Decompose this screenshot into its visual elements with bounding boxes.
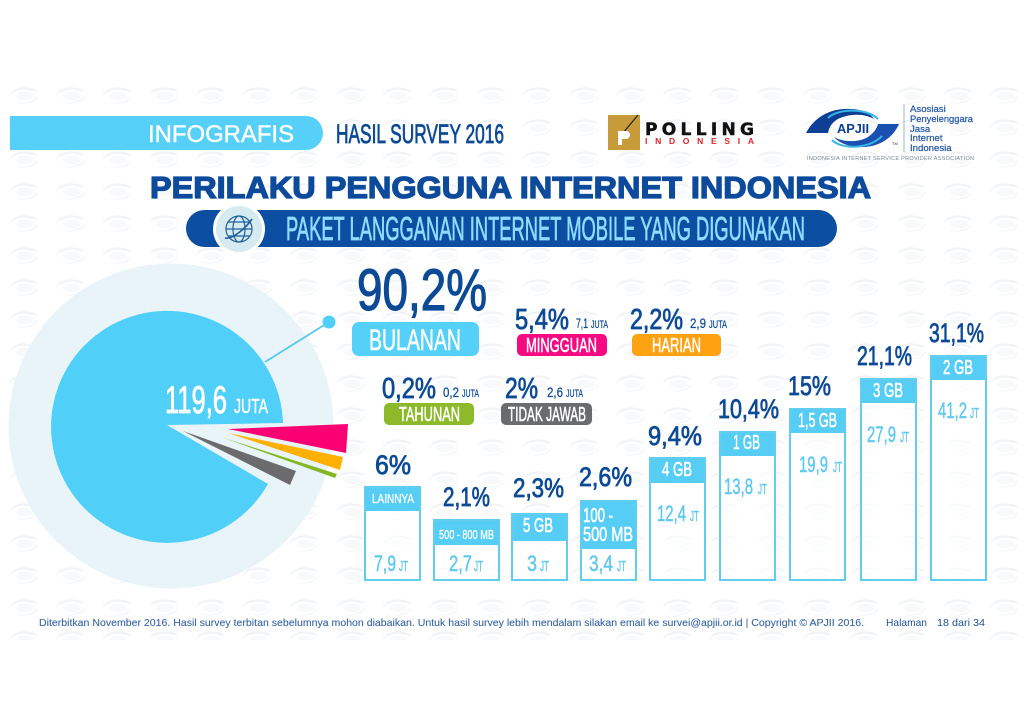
bar: 4 GB: JT [690,508,699,525]
bar: 3 GB: 27,9 [867,422,896,447]
bar: 1,5 GB: 15% [788,371,831,401]
stat: harian: JUTA [709,319,727,331]
logo: APJII: Jasa [910,124,931,135]
bar: 4 GB: 9,4% [648,421,702,451]
pie value: JUTA [234,396,268,418]
stat: harian [630,304,727,357]
pie value: 119,6 [165,379,227,422]
bar: lainnya: LAINNYA [372,491,414,506]
logo: APJII: Asosiasi [910,104,946,115]
bar: 4 GB: 4 GB [662,459,692,481]
stat: tidak jawab: 2% [505,373,538,405]
logo: polling indonesia: INDONESIA [645,136,754,146]
bar: 100-500 MB: JT [617,558,626,575]
logo: polling indonesia [608,115,754,150]
stat: tahunan: 0,2 [443,384,459,400]
bar: 5 GB [511,473,568,580]
logo: APJII: INDONESIA INTERNET SERVICE PROVIDER ASSOCIATION [807,156,974,162]
bar: 1,5 GB: JT [833,459,842,476]
stat: tidak jawab: 2,6 [547,384,563,400]
bar: 500-800 MB: 500 - 800 MB [439,527,494,542]
page number: Halaman [886,617,927,629]
logo: APJII [806,104,974,162]
bar: 1 GB: 10,4% [718,394,779,424]
stat: tahunan: 0,2% [382,373,436,405]
bar: 1 GB: 1 GB [733,432,760,454]
bar: 1 GB: JT [758,481,767,498]
bar: 1,5 GB [788,371,846,580]
stat: tahunan [382,373,479,426]
header banner: infografis: INFOGRAFIS [148,121,294,148]
subtitle banner [186,203,837,255]
bar: lainnya [364,450,421,580]
pie slice: harian [228,433,343,470]
page number [886,617,985,629]
logo: APJII: Indonesia [910,143,952,154]
bar: 2 GB: JT [970,405,979,422]
stat: tidak jawab: TIDAK JAWAB [508,404,586,426]
leader line [265,316,336,362]
bar: 100-500 MB [579,462,637,580]
stat: mingguan [515,304,608,357]
bar: 3 GB: 3 GB [873,380,903,402]
stat: tahunan: JUTA [462,388,479,400]
stat: harian: 2,9 [690,315,706,331]
bar: 3 GB: JT [900,429,909,446]
stat: bulanan: 90,2% [357,258,487,323]
bar: 3 GB [857,341,917,580]
pie slice: tahunan [224,438,337,478]
bar: 3 GB: 21,1% [857,341,912,371]
title: PERILAKU PENGGUNA INTERNET INDONESIA [150,170,871,205]
stat: tahunan: TAHUNAN [399,404,460,426]
bar: lainnya: JT [399,558,408,575]
pie slice: tidak jawab [183,431,296,485]
bar: 100-500 MB: 2,6% [579,462,632,492]
bar: 500-800 MB: 2,7 [449,551,472,576]
pie slice: mingguan [228,424,348,453]
header banner: infografis [10,116,323,150]
bar: 500-800 MB [433,482,500,580]
stat: tidak jawab [501,373,592,426]
bar: 500-800 MB: JT [474,558,483,575]
stat: harian: HARIAN [652,335,701,357]
stat: harian: 2,2% [630,304,683,336]
bar: 100-500 MB: 3,4 [589,551,613,576]
logo: APJII: TM [892,141,898,146]
bar: 2 GB: 31,1% [929,318,984,348]
heading: hasil survey 2016: HASIL SURVEY 2016 [336,119,504,149]
bar: 1,5 GB: 19,9 [799,452,828,477]
bar: 2 GB: 41,2 [938,398,967,423]
bar: 4 GB [648,421,706,580]
stat: bulanan: BULANAN [369,324,461,357]
logo: polling indonesia: POLLING [645,120,754,140]
stat: bulanan [352,258,487,357]
pie slice: bulanan [51,311,283,543]
bar: 5 GB: JT [540,558,549,575]
logo: APJII: APJII [837,121,869,136]
bar: 5 GB: 3 [527,551,537,576]
stat: tidak jawab: JUTA [566,388,583,400]
footer note: Diterbitkan November 2016. Hasil survey terbitan sebelumnya mohon diabaikan. Untuk hasil survey lebih mendalam silakan email ke survei@apjii.or.id | Copyright © APJII 2016. [39,617,864,629]
stat: mingguan: JUTA [591,319,608,331]
stat: mingguan: MINGGUAN [526,335,597,357]
bar: lainnya: 6% [375,450,411,480]
stat: mingguan: 7,1 [576,315,588,331]
logo: APJII: Penyelenggara [910,114,974,125]
bar: 1,5 GB: 1,5 GB [798,410,837,432]
page number: 18 dari 34 [937,617,985,629]
bar: 2 GB [929,318,987,580]
bar: 4 GB: 12,4 [657,501,686,526]
bar: 100-500 MB: 100 - [583,505,613,527]
bar: 5 GB: 5 GB [523,515,553,537]
bar: 500-800 MB: 2,1% [443,482,490,512]
bar: 5 GB: 2,3% [513,473,564,503]
bar: 100-500 MB: 500 MB [583,524,633,546]
bar: 2 GB: 2 GB [943,357,973,379]
logo: APJII: Internet [910,133,943,144]
icon: globe [213,203,265,255]
bar: 1 GB: 13,8 [724,474,753,499]
bar: 1 GB [718,394,779,580]
stat: mingguan: 5,4% [515,304,569,336]
bar: lainnya: 7,9 [374,551,396,576]
pie chart [8,264,348,588]
